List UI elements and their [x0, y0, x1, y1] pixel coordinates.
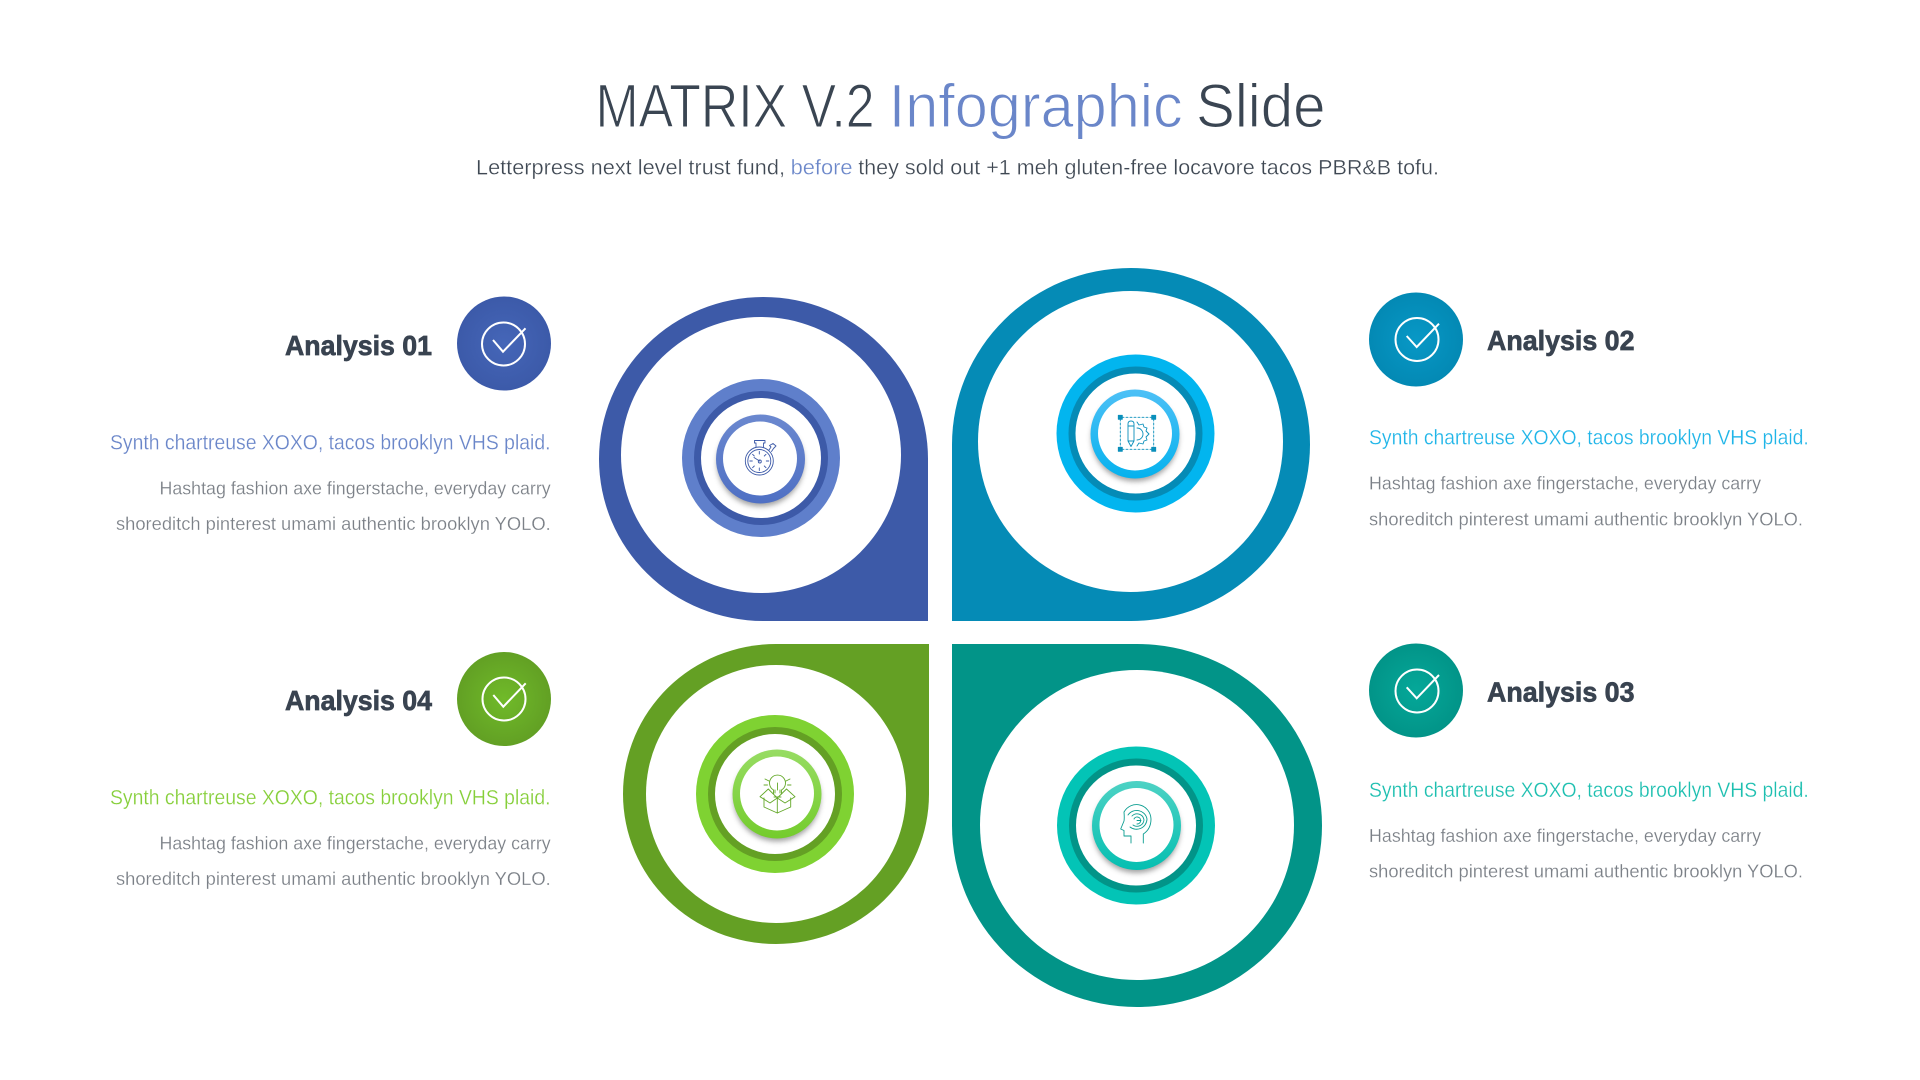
text: Analysis 04 body: Hashtag fashion axe fingerstache, everyday carry [160, 832, 551, 854]
icon: check badge blue [457, 296, 551, 390]
title: Infographic [889, 72, 1183, 140]
heading: Analysis 03: Analysis 03 [1487, 676, 1634, 708]
text: Analysis 02 body: shoreditch pinterest umami authentic brooklyn YOLO. [1369, 508, 1803, 530]
text: Analysis 01 body: shoreditch pinterest umami authentic brooklyn YOLO. [116, 513, 551, 534]
icon: check badge cyan [1369, 292, 1463, 386]
text: Analysis 02 subheading: Synth chartreuse XOXO, tacos brooklyn VHS plaid. [1369, 426, 1809, 450]
text: Analysis 01 body: Hashtag fashion axe fingerstache, everyday carry [160, 478, 551, 498]
icon: idea box [760, 775, 795, 813]
text: Analysis 01 body [116, 478, 551, 534]
teardrop: blue [599, 297, 928, 621]
panel: Analysis 03 text [1369, 644, 1809, 882]
icon: pencil and gear [1118, 415, 1156, 451]
text: Analysis 03 body [1369, 825, 1803, 882]
icon: stopwatch [745, 440, 776, 475]
icon: check badge green [457, 652, 551, 746]
text: Analysis 04 body [116, 832, 551, 889]
text: Analysis 03 body: Hashtag fashion axe fingerstache, everyday carry [1369, 825, 1762, 846]
text: Analysis 03 body: shoreditch pinterest umami authentic brooklyn YOLO. [1369, 860, 1803, 882]
rings: green [696, 715, 854, 873]
teardrop: green [623, 644, 929, 944]
title: MATRIX V.2 [596, 72, 874, 140]
text: Analysis 04 body: shoreditch pinterest umami authentic brooklyn YOLO. [116, 868, 551, 889]
heading: Analysis 01: Analysis 01 [285, 330, 432, 361]
heading: Analysis 02: Analysis 02 [1487, 325, 1634, 356]
teardrop: teal [952, 644, 1322, 1007]
rings: cyan [1056, 354, 1214, 512]
panel: Analysis 04 text [110, 652, 551, 889]
text: Analysis 03 subheading: Synth chartreuse XOXO, tacos brooklyn VHS plaid. [1369, 779, 1809, 802]
icon: check badge teal [1369, 644, 1463, 738]
rings: blue [682, 379, 840, 537]
icon: head with maze [1121, 805, 1151, 843]
subtitle: they sold out +1 meh gluten-free locavore tacos PBR&B tofu. [858, 156, 1439, 180]
title [596, 72, 1326, 140]
heading: Analysis 04: Analysis 04 [285, 685, 432, 716]
panel: Analysis 02 text [1369, 292, 1809, 530]
text: Analysis 01 subheading: Synth chartreuse XOXO, tacos brooklyn VHS plaid. [110, 432, 550, 454]
rings: teal [1057, 746, 1215, 904]
subtitle [476, 156, 1439, 180]
subtitle: Letterpress next level trust fund, [476, 156, 785, 180]
text: Analysis 02 body: Hashtag fashion axe fingerstache, everyday carry [1369, 472, 1762, 494]
text: Analysis 04 subheading: Synth chartreuse XOXO, tacos brooklyn VHS plaid. [110, 786, 550, 810]
teardrop: cyan [952, 268, 1310, 621]
text: Analysis 02 body [1369, 472, 1803, 530]
panel: Analysis 01 text [110, 296, 551, 534]
title: Slide [1196, 72, 1326, 140]
subtitle: before [791, 156, 853, 180]
